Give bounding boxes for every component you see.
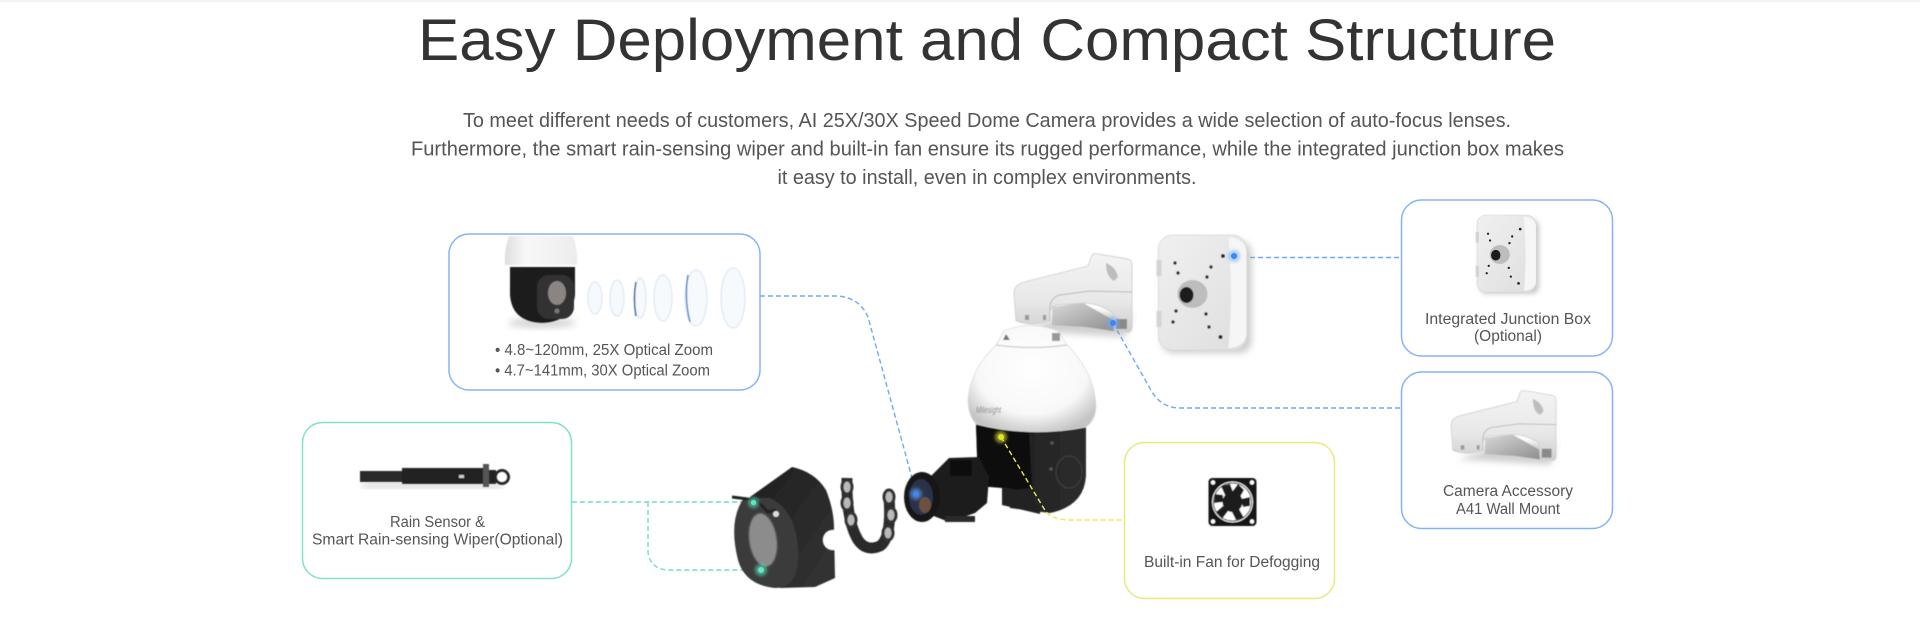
intro paragraph: it easy to install, even in complex environments. [778, 167, 1196, 189]
intro paragraph: Furthermore, the smart rain-sensing wiper and built-in fan ensure its rugged performance, while the integrated junction box makes [411, 138, 1564, 160]
wiper caption: Rain Sensor & [390, 514, 486, 531]
camera white dome [968, 326, 1096, 432]
panel: integrated junction box [1402, 200, 1612, 356]
icon: fan [1208, 478, 1256, 526]
wall mount caption [1443, 483, 1573, 518]
camera black base [976, 424, 1086, 513]
lens specification text [495, 342, 713, 380]
panel: rain sensor and wiper [302, 422, 572, 578]
lens specification text: • 4.8~120mm, 25X Optical Zoom [495, 342, 713, 359]
icon: small wall mount [1451, 391, 1556, 465]
junction box caption: (Optional) [1474, 328, 1542, 345]
wiper caption: Smart Rain-sensing Wiper(Optional) [312, 532, 563, 548]
wall mount caption: A41 Wall Mount [1456, 501, 1561, 518]
panel: lens options [449, 234, 760, 390]
top edge strip [0, 0, 1920, 2]
icon: wiper [360, 464, 510, 488]
wall mount caption: Camera Accessory [1443, 483, 1573, 500]
illustration: dome camera body [968, 326, 1096, 514]
indicator dots [748, 250, 1240, 576]
intro paragraph: To meet different needs of customers, AI 25X/30X Speed Dome Camera provides a wide selection of auto-focus lenses. [463, 110, 1511, 132]
lens specification text: • 4.7~141mm, 30X Optical Zoom [495, 362, 710, 380]
wiper caption [312, 514, 563, 548]
intro paragraph [411, 110, 1564, 189]
illustration: front shell [732, 467, 843, 588]
camera logo text: Milesight [976, 405, 1001, 415]
panel: wall mount [1402, 372, 1612, 528]
illustration: wall mount on camera [1014, 254, 1132, 337]
junction box caption [1425, 311, 1591, 345]
icon: lens elements [588, 268, 745, 328]
yellow connector line [1001, 437, 1124, 520]
junction box caption: Integrated Junction Box [1425, 311, 1591, 328]
connector lines [572, 258, 1401, 570]
title: Easy Deployment and Compact Structure [418, 8, 1556, 73]
illustration: IR LED bracket [842, 478, 896, 548]
icon: small junction box [1476, 215, 1539, 294]
icon: small dome camera [505, 236, 577, 328]
illustration: junction box [1156, 235, 1252, 353]
fan caption: Built-in Fan for Defogging [1144, 554, 1320, 571]
panel: built-in fan [1124, 442, 1334, 598]
illustration: lens module [904, 457, 989, 522]
